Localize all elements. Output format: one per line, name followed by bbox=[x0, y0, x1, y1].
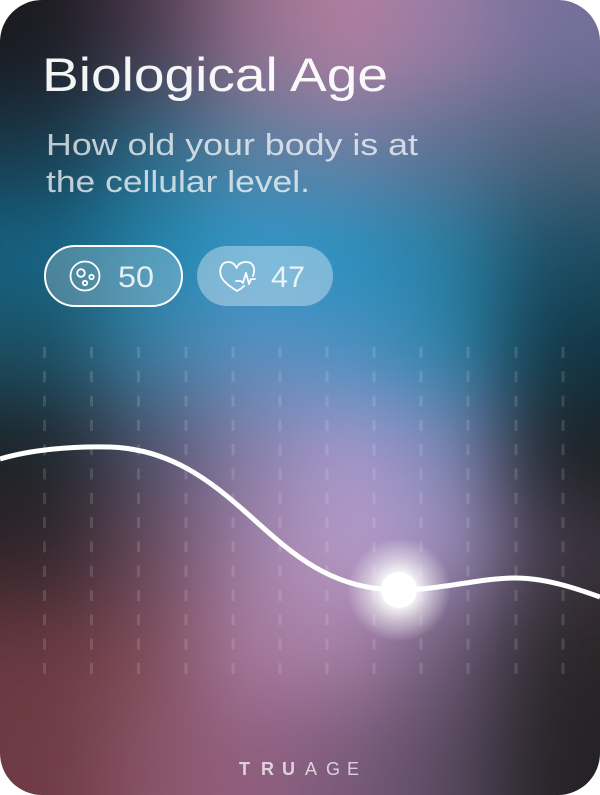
title: Biological Age bbox=[42, 48, 388, 101]
pill: heart age 47 bbox=[197, 246, 333, 306]
subtitle bbox=[46, 133, 418, 192]
brand logo: TRU AGE bbox=[239, 759, 359, 779]
pill: cellular age 50 bbox=[45, 246, 182, 306]
subtitle: How old your body is at bbox=[46, 127, 418, 162]
icon: heart with pulse bbox=[220, 262, 255, 291]
dashed vertical grid lines bbox=[44, 347, 563, 677]
value: 47: 47 bbox=[271, 261, 305, 294]
marker: glowing point bbox=[350, 541, 448, 640]
value: 50: 50 bbox=[118, 261, 154, 294]
subtitle: the cellular level. bbox=[46, 164, 310, 199]
icon: cell bbox=[70, 262, 100, 290]
age curve bbox=[0, 447, 600, 597]
